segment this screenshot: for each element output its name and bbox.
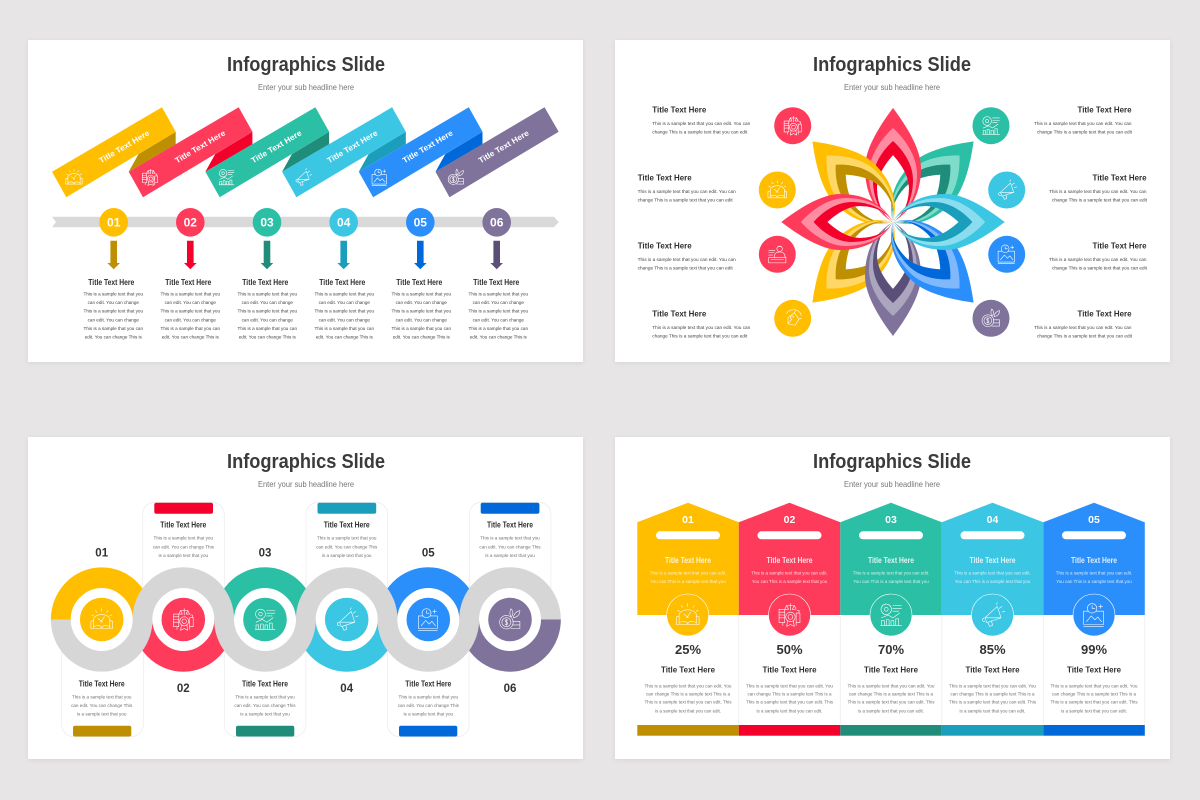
column 2: You can This is a sample text that you <box>752 579 828 584</box>
step numbers: 05 <box>422 548 435 560</box>
card 2 <box>143 502 224 639</box>
column 3: You can This is a sample text that you <box>853 579 929 584</box>
step 3 text: can edit. You can change <box>242 300 293 305</box>
icon: coin badge <box>972 300 1010 337</box>
slide 3 subtitle: Enter your sub headline here <box>258 479 354 489</box>
ribbon 3: Title Text Here <box>250 128 304 165</box>
card 4: can edit. You can change This <box>316 544 378 549</box>
left text 1: Title Text Here <box>652 104 707 114</box>
step 3 marker <box>253 208 281 269</box>
step 5 text: can edit. You can change <box>396 300 447 305</box>
column 3: Title Text Here <box>864 665 918 675</box>
column 3 <box>840 503 942 736</box>
slide 1 title: Infographics Slide <box>227 54 385 76</box>
right text 4: Title Text Here <box>1078 308 1132 318</box>
step 1 marker: 01 <box>107 216 121 230</box>
card 4 <box>306 502 388 639</box>
column 1: Title Text Here <box>661 665 715 675</box>
step 6 text <box>469 278 528 340</box>
left text 4 <box>652 308 751 338</box>
step numbers: 04 <box>340 683 354 695</box>
card 1: This is a sample text that you <box>72 694 132 699</box>
step 1 text: edit. You can change This is <box>85 335 143 340</box>
slide 3 title: Infographics Slide <box>227 451 385 473</box>
column 5: Title Text Here <box>1071 556 1117 565</box>
left text 4: change This is a sample text that you can edit <box>652 334 748 338</box>
icon: chart badge <box>972 107 1010 144</box>
step 5 text: edit. You can change This is <box>393 335 451 340</box>
step numbers <box>95 548 516 695</box>
card 2: can edit. You can change This <box>153 544 215 549</box>
step 6 text: This is a sample text that you <box>469 309 528 314</box>
step 2 text: This is a sample that you can <box>161 326 220 331</box>
right text 1 <box>1034 104 1133 134</box>
step 1 text: This is a sample text that you <box>84 292 143 297</box>
right text 2: Title Text Here <box>1092 172 1147 182</box>
step 6 marker <box>482 208 511 269</box>
column 5: can change This is a sample text This is a <box>1052 692 1136 696</box>
step 6 text: This is a sample that you can <box>469 326 528 331</box>
step 4 text: edit. You can change This is <box>316 335 374 340</box>
right text 4: This is a sample text that you can edit. You can <box>1034 325 1132 330</box>
petal yellow upper left <box>793 122 913 242</box>
panel: slide 4 percentage columns <box>615 437 1170 759</box>
step 6 text: can edit. You can change <box>473 317 524 322</box>
column 4: 85% <box>979 642 1006 657</box>
step numbers: 02 <box>177 683 190 695</box>
card 6: This is a sample text that you <box>480 536 540 541</box>
column 5: Title Text Here <box>1067 665 1121 675</box>
left text 2: change This is a sample text that you can edit <box>638 198 733 202</box>
ribbon 3 <box>205 107 329 197</box>
column 1: This is a sample text that you can edit. You <box>644 684 732 688</box>
step numbers: 03 <box>259 548 271 560</box>
ribbon 5: Title Text Here <box>401 128 455 165</box>
step 5 marker <box>406 208 435 269</box>
column 2: 50% <box>776 642 803 657</box>
left text 2: This is a sample text that you can edit. You can <box>638 189 736 194</box>
card 1: is a sample text that you <box>77 712 127 717</box>
slide 2 subtitle: Enter your sub headline here <box>844 82 940 92</box>
card 5: Title Text Here <box>405 680 452 689</box>
column 4: You can This is a sample text that you <box>955 579 1031 584</box>
left text 2: Title Text Here <box>638 172 692 182</box>
ribbons <box>52 107 559 197</box>
column 5: 05 <box>1088 514 1100 526</box>
ribbon 4: Title Text Here <box>326 128 380 165</box>
card 3: Title Text Here <box>242 680 288 689</box>
flower chart <box>781 108 1005 336</box>
column 1: 25% <box>675 642 701 657</box>
column 1: is a sample text that you can edit. <box>655 708 721 714</box>
step 3 text: can edit. You can change <box>242 317 293 322</box>
petal purple <box>865 222 921 336</box>
step numbers: 06 <box>504 683 516 695</box>
card 3: This is a sample text that you <box>235 694 295 699</box>
step numbers: 01 <box>95 548 109 560</box>
step 3 text: This is a sample text that you <box>238 309 297 314</box>
ribbon 5 <box>359 107 482 197</box>
column 1: This is a sample text that you can edit. This <box>644 700 732 704</box>
right text 1: This is a sample text that you can edit. You can <box>1034 121 1132 126</box>
column 4: is a sample text that you can edit. <box>960 708 1026 714</box>
petal cyan <box>893 194 1005 250</box>
column 5: This is a sample text that you can edit. <box>1056 570 1132 576</box>
ring 1 centre <box>71 588 133 650</box>
step 2 text: Title Text Here <box>165 278 212 287</box>
right text 4 <box>1034 308 1133 338</box>
column 1: You can This is a sample text that you <box>650 579 726 584</box>
column 3: This is a sample text that you can edit. You <box>848 684 935 688</box>
column 4: This is a sample text that you can edit. This <box>949 700 1037 704</box>
step 4 text: This is a sample that you can <box>315 326 374 331</box>
panel: slide 2 flower <box>615 40 1170 362</box>
step 1 text: This is a sample that you can <box>84 326 143 331</box>
timeline arrow bar <box>52 217 559 227</box>
left text 3: Title Text Here <box>638 240 692 250</box>
left text 4: This is a sample text that you can edit. You can <box>652 325 751 330</box>
card 1: can edit. You can change This <box>71 703 133 708</box>
right text 1: Title Text Here <box>1078 104 1132 114</box>
step 5 text: This is a sample text that you <box>392 292 451 297</box>
petal teal <box>873 122 993 242</box>
right text 2: change This is a sample text that you can edit <box>1052 198 1148 202</box>
step 2 text <box>161 278 220 340</box>
right text 3 <box>1049 240 1148 270</box>
column 4: can change This is a sample text This is a <box>950 692 1035 696</box>
step 3 marker: 03 <box>260 216 274 230</box>
petal blue <box>873 202 993 322</box>
column 2: is a sample text that you can edit. <box>756 708 822 714</box>
column 4: This is a sample text that you can edit. <box>954 570 1031 576</box>
step 5 text <box>392 278 451 340</box>
left text 2 <box>638 172 736 202</box>
left text 4: Title Text Here <box>652 308 707 318</box>
column 4 <box>942 503 1043 736</box>
step 2 text: This is a sample text that you <box>161 292 220 297</box>
column 3: 70% <box>878 642 904 657</box>
step 1 text: can edit. You can change <box>88 317 139 322</box>
icon: map badge <box>988 236 1025 273</box>
petal red left <box>781 194 893 250</box>
step 6 marker: 06 <box>490 216 504 230</box>
column 3: Title Text Here <box>868 556 914 565</box>
card 6 <box>469 502 551 639</box>
column 3: This is a sample text that you can edit. <box>853 570 929 576</box>
step 2 marker: 02 <box>184 216 197 230</box>
icon: scales badge <box>774 107 811 144</box>
card 3: can edit. You can change This <box>234 703 296 708</box>
card 3 <box>224 600 306 737</box>
icon: pen badge <box>774 300 811 337</box>
ribbon 2: Title Text Here <box>173 128 228 165</box>
step 1 text: Title Text Here <box>88 278 135 287</box>
step 3 text: edit. You can change This is <box>239 335 297 340</box>
column 4: Title Text Here <box>966 665 1020 675</box>
coloured ring halves <box>61 578 550 661</box>
card 6: Title Text Here <box>487 520 533 529</box>
step 5 text: This is a sample text that you <box>392 309 451 314</box>
step 1 text: This is a sample text that you <box>84 309 143 314</box>
card 2: This is a sample text that you <box>154 536 213 541</box>
ring 5 centre <box>397 588 459 650</box>
step 6 text: Title Text Here <box>473 278 520 287</box>
icon: book badge <box>759 172 796 208</box>
card 2: is a sample text that you <box>159 553 209 558</box>
step 2 text: This is a sample text that you <box>161 309 220 314</box>
ring 2 centre <box>152 588 214 650</box>
card 5: This is a sample text that you <box>399 694 458 699</box>
step 2 text: can edit. You can change <box>165 300 216 305</box>
column 1: can change This is a sample text This is a <box>646 692 730 696</box>
card 4: This is a sample text that you <box>317 536 377 541</box>
step 4 marker <box>329 208 358 269</box>
petal red top <box>865 108 921 222</box>
ring 3 centre <box>234 588 296 650</box>
card 4: Title Text Here <box>324 520 370 529</box>
column 5: You can This is a sample text that you <box>1056 579 1132 584</box>
right text 3: change This is a sample text that you can edit <box>1052 266 1148 270</box>
left text 1: change This is a sample text that you can edit <box>652 130 748 134</box>
column 1: This is a sample text that you can edit. <box>650 570 726 576</box>
step 1 text: can edit. You can change <box>88 300 139 305</box>
column 2 <box>739 503 840 736</box>
column 2: This is a sample text that you can edit. This <box>746 700 834 704</box>
right text 3: This is a sample text that you can edit. You can <box>1049 257 1147 262</box>
ribbon 6: Title Text Here <box>477 128 531 165</box>
step 5 text: Title Text Here <box>396 278 443 287</box>
step 5 text: can edit. You can change <box>396 317 447 322</box>
step 5 text: This is a sample that you can <box>392 326 451 331</box>
column 5 <box>1043 503 1145 736</box>
column 2: 02 <box>784 514 795 526</box>
slide 2 title: Infographics Slide <box>813 54 971 76</box>
step 4 text: This is a sample text that you <box>315 309 374 314</box>
column 2: can change This is a sample text This is a <box>748 692 832 696</box>
column 2: Title Text Here <box>766 556 813 565</box>
step 4 text: can edit. You can change <box>319 317 370 322</box>
column 4: Title Text Here <box>970 556 1016 565</box>
column 1: Title Text Here <box>665 556 711 565</box>
ring 6 centre <box>479 588 541 650</box>
column 2: Title Text Here <box>762 665 817 675</box>
card 5: can edit. You can change This <box>398 703 460 708</box>
ribbon 1: Title Text Here <box>97 128 152 165</box>
right text 1: change This is a sample text that you can edit <box>1037 130 1133 134</box>
column 5: This is a sample text that you can edit. You <box>1050 684 1138 688</box>
right text 4: change This is a sample text that you can edit <box>1037 334 1133 338</box>
column 3: This is a sample text that you can edit. This <box>848 700 935 704</box>
ring 4 centre <box>316 588 378 650</box>
column 5: is a sample text that you can edit. <box>1061 708 1127 714</box>
panel: slide 1 ribbon timeline <box>28 40 583 362</box>
column 4: This is a sample text that you can edit. You <box>949 684 1036 688</box>
step 3 text: This is a sample that you can <box>238 326 297 331</box>
step 6 text: can edit. You can change <box>473 300 524 305</box>
column 2: This is a sample text that you can edit. <box>751 570 828 576</box>
step 2 marker <box>176 208 205 269</box>
step 6 text: This is a sample text that you <box>469 292 528 297</box>
left text 3: change This is a sample text that you can edit <box>638 266 733 270</box>
column 3: can change This is a sample text This is a <box>849 692 933 696</box>
card 5: is a sample text that you <box>404 712 454 717</box>
icon: megaphone badge <box>988 172 1025 208</box>
ribbon 6 <box>436 107 559 197</box>
step 4 text: Title Text Here <box>319 278 366 287</box>
column 2: This is a sample text that you can edit. You <box>746 684 833 688</box>
ribbon 1 <box>52 107 176 197</box>
card 3: is a sample text that you <box>240 712 290 717</box>
column 5: This is a sample text that you can edit. This <box>1050 700 1138 704</box>
left text 1: This is a sample text that you can edit. You can <box>652 121 751 126</box>
step 4 text: can edit. You can change <box>319 300 370 305</box>
card 6: can edit. You can change This <box>479 544 541 549</box>
column 5: 99% <box>1081 642 1107 657</box>
column 3: 03 <box>885 514 897 526</box>
column 1: 01 <box>682 514 694 526</box>
grey ring wave <box>61 578 550 661</box>
ribbon 2 <box>129 107 252 197</box>
card 6: is a sample text that you <box>485 553 535 558</box>
step 5 marker: 05 <box>414 216 427 230</box>
panel: slide 3 ring chain <box>28 437 583 759</box>
step 3 text <box>238 278 297 340</box>
slide 4 title: Infographics Slide <box>813 451 971 473</box>
right text 2: This is a sample text that you can edit. You can <box>1049 189 1147 194</box>
slide 1 subtitle: Enter your sub headline here <box>258 82 354 92</box>
step 2 text: edit. You can change This is <box>162 335 220 340</box>
card 2: Title Text Here <box>160 520 207 529</box>
petal yellow lower left <box>793 202 913 322</box>
step 3 text: This is a sample text that you <box>238 292 297 297</box>
step 1 text <box>84 278 143 340</box>
ribbon 4 <box>282 107 406 197</box>
slide 4 subtitle: Enter your sub headline here <box>844 479 940 489</box>
step 4 text: This is a sample text that you <box>315 292 374 297</box>
column 1 <box>637 503 739 736</box>
card 1: Title Text Here <box>79 680 125 689</box>
step 2 text: can edit. You can change <box>165 317 216 322</box>
step 4 text <box>315 278 374 340</box>
card 5 <box>388 600 469 737</box>
step 6 text: edit. You can change This is <box>470 335 528 340</box>
right text 2 <box>1049 172 1148 202</box>
card 4: is a sample text that you <box>322 553 372 558</box>
right text 3: Title Text Here <box>1092 240 1147 250</box>
column 4: 04 <box>987 514 998 526</box>
left text 1 <box>652 104 751 134</box>
column 3: is a sample text that you can edit. <box>858 708 924 714</box>
left text 3 <box>638 240 736 270</box>
step 3 text: Title Text Here <box>242 278 289 287</box>
icon: person badge <box>759 236 796 273</box>
left text 3: This is a sample text that you can edit. You can <box>638 257 736 262</box>
step 4 marker: 04 <box>337 216 351 230</box>
card 1 <box>62 600 143 737</box>
step 1 marker <box>99 208 128 269</box>
